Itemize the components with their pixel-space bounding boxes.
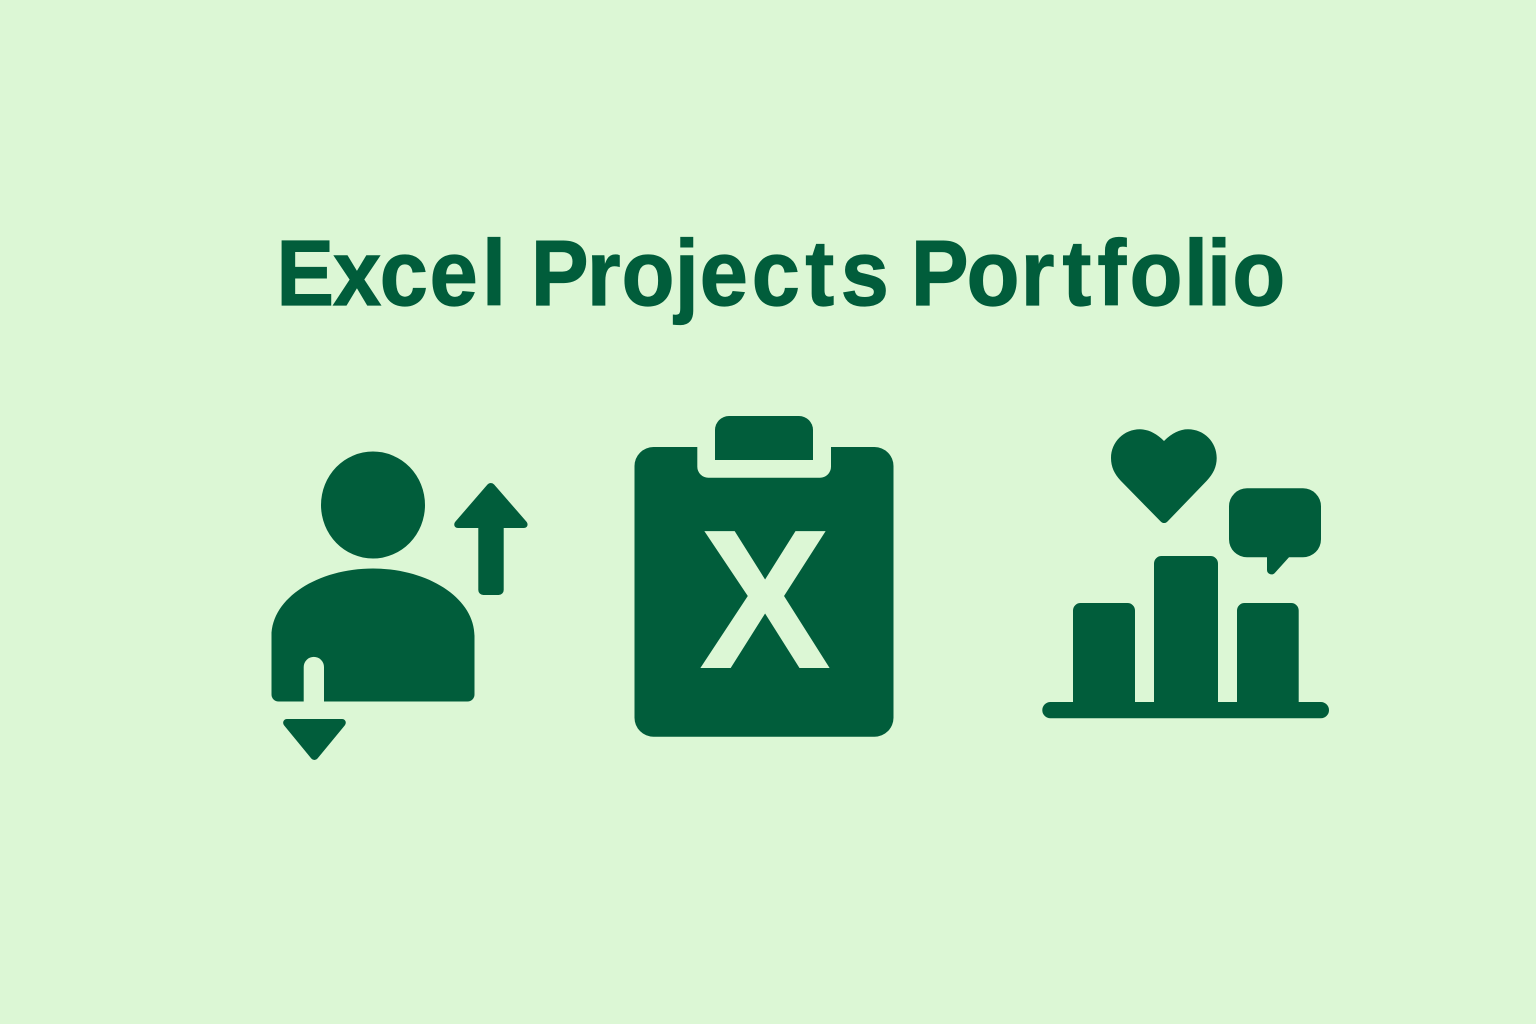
icon: bar chart with heart and speech bubble	[1042, 429, 1329, 718]
bar 1	[1073, 603, 1135, 705]
speech bubble	[1229, 488, 1321, 574]
title: Excel Projects Portfolio	[276, 222, 1285, 326]
bar 2	[1154, 556, 1218, 705]
letter X: X	[699, 489, 831, 711]
heart	[1111, 429, 1217, 523]
person head	[321, 452, 425, 558]
down arrow head	[283, 719, 346, 760]
chart baseline	[1042, 702, 1329, 718]
bar 3	[1237, 603, 1299, 705]
clipboard board	[634, 447, 894, 737]
icon: person with up and down arrows	[272, 452, 528, 760]
clipboard clip	[715, 416, 813, 460]
icon: clipboard with Excel X	[634, 416, 894, 737]
person body with slot	[272, 568, 475, 702]
up arrow	[454, 483, 528, 595]
